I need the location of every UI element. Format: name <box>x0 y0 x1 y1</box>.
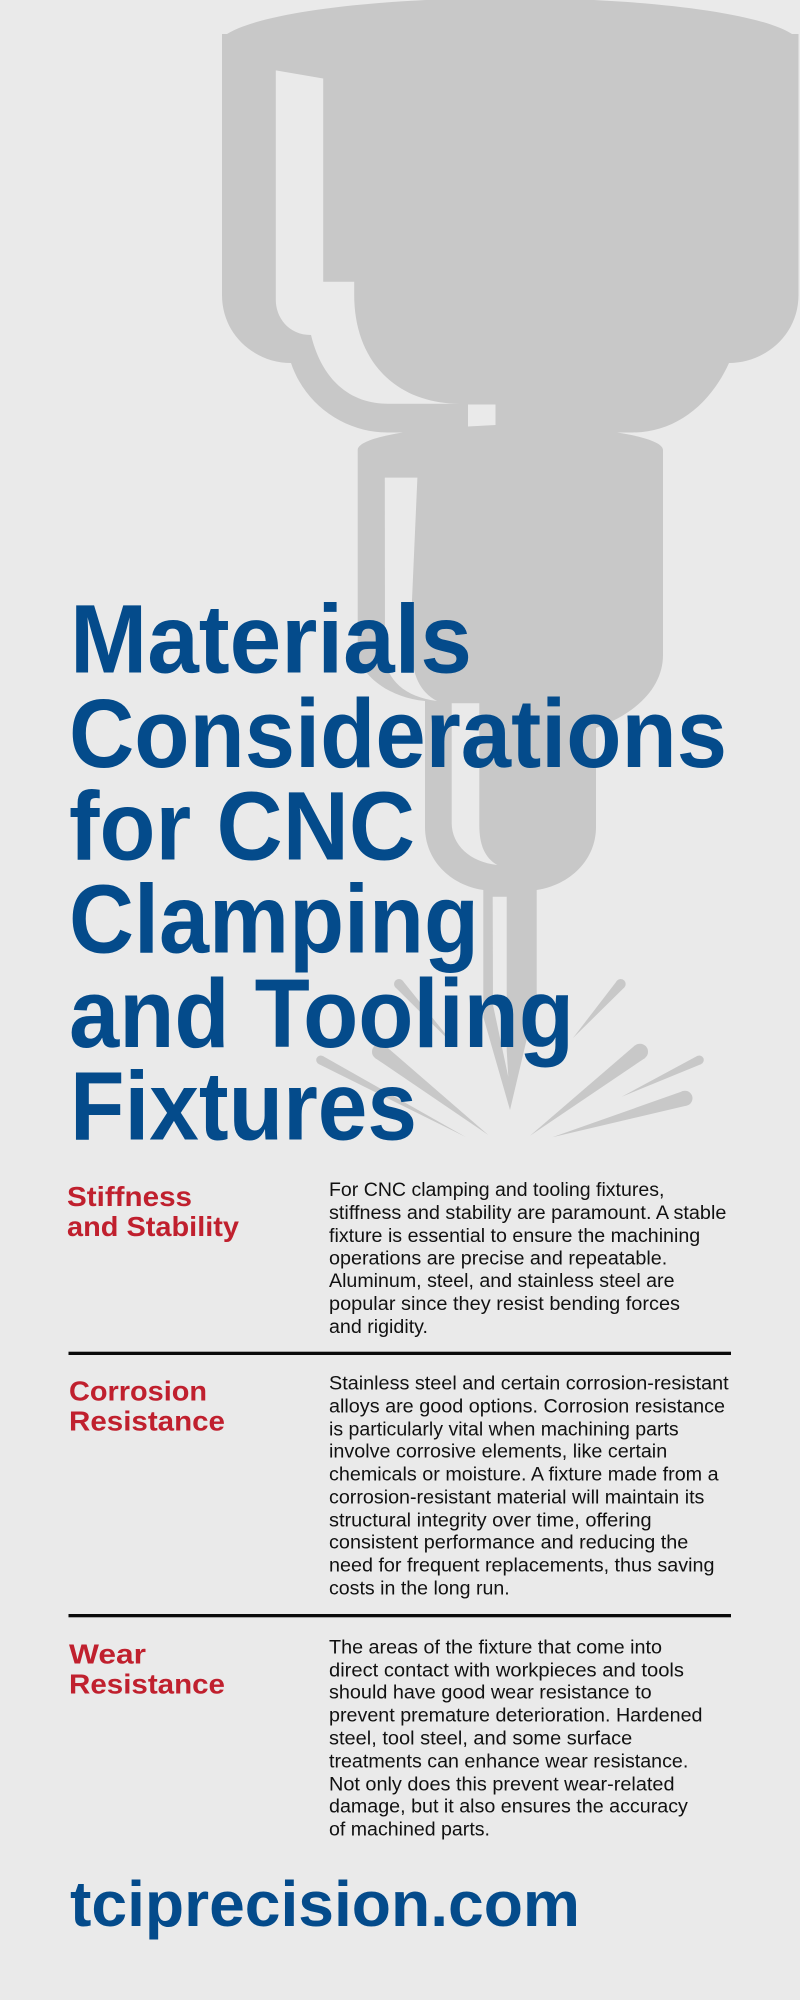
body text: wear resistance: should have good wear resistance to <box>329 1682 652 1704</box>
title: Fixtures <box>70 1052 417 1160</box>
heading: corrosion resistance <box>69 1376 225 1437</box>
heading: wear resistance: Resistance <box>69 1668 225 1699</box>
body text: stiffness and stability: Aluminum, steel, and stainless steel are <box>329 1270 675 1292</box>
body text: corrosion resistance: structural integrity over time, offering <box>329 1509 652 1531</box>
body text: stiffness and stability: For CNC clamping and tooling fixtures, <box>329 1179 664 1201</box>
title: Clamping <box>69 865 479 974</box>
body text: wear resistance: prevent premature deterioration. Hardened <box>329 1704 702 1726</box>
body text: wear resistance: damage, but it also ensures the accuracy <box>329 1796 688 1818</box>
body text: corrosion resistance: costs in the long run. <box>329 1577 510 1599</box>
body text: wear resistance: treatments can enhance wear resistance. <box>329 1750 688 1772</box>
heading: stiffness and stability: Stiffness <box>67 1181 192 1212</box>
body text: stiffness and stability: stiffness and stability are paramount. A stable <box>329 1202 726 1224</box>
title: and Tooling <box>69 959 574 1068</box>
panel: corrosion resistance <box>69 1372 729 1599</box>
title <box>69 585 727 1160</box>
heading: corrosion resistance: Corrosion <box>69 1376 207 1407</box>
icon: CNC spindle and drill bit <box>222 0 798 1110</box>
body text: corrosion resistance: Stainless steel and certain corrosion-resistant <box>329 1372 729 1394</box>
panel: stiffness and stability <box>67 1179 726 1338</box>
heading: corrosion resistance: Resistance <box>69 1406 225 1437</box>
body text: stiffness and stability: fixture is essential to ensure the machining <box>329 1225 700 1247</box>
body text: corrosion resistance: consistent performance and reducing the <box>329 1531 688 1553</box>
body text: corrosion resistance: corrosion-resistant material will maintain its <box>329 1486 705 1508</box>
body text: stiffness and stability: and rigidity. <box>329 1316 428 1338</box>
title: Materials <box>70 585 472 694</box>
body text: stiffness and stability: popular since they resist bending forces <box>329 1293 680 1315</box>
panel: wear resistance <box>69 1636 702 1841</box>
footer website: tciprecision.com <box>70 1868 580 1940</box>
body text: wear resistance: The areas of the fixture that come into <box>329 1636 662 1658</box>
heading: stiffness and stability <box>67 1181 239 1242</box>
body text: stiffness and stability <box>329 1179 726 1338</box>
body text: corrosion resistance: involve corrosive elements, like certain <box>329 1441 667 1463</box>
heading: stiffness and stability: and Stability <box>67 1211 239 1242</box>
heading: wear resistance <box>69 1638 225 1699</box>
body text: corrosion resistance: chemicals or moisture. A fixture made from a <box>329 1463 719 1485</box>
icon: sparks <box>316 979 704 1137</box>
heading: wear resistance: Wear <box>69 1638 146 1669</box>
body text: corrosion resistance: alloys are good options. Corrosion resistance <box>329 1395 725 1417</box>
body text: wear resistance: direct contact with workpieces and tools <box>329 1659 684 1681</box>
body text: wear resistance: Not only does this prevent wear-related <box>329 1773 674 1795</box>
body text: wear resistance: steel, tool steel, and some surface <box>329 1727 632 1749</box>
body text: wear resistance <box>329 1636 702 1841</box>
body text: corrosion resistance: is particularly vital when machining parts <box>329 1418 679 1440</box>
body text: stiffness and stability: operations are precise and repeatable. <box>329 1248 667 1270</box>
body text: corrosion resistance <box>329 1372 729 1599</box>
title: Considerations <box>69 679 727 788</box>
body text: corrosion resistance: need for frequent replacements, thus saving <box>329 1554 714 1576</box>
title: for CNC <box>69 772 415 881</box>
body text: wear resistance: of machined parts. <box>329 1819 490 1841</box>
